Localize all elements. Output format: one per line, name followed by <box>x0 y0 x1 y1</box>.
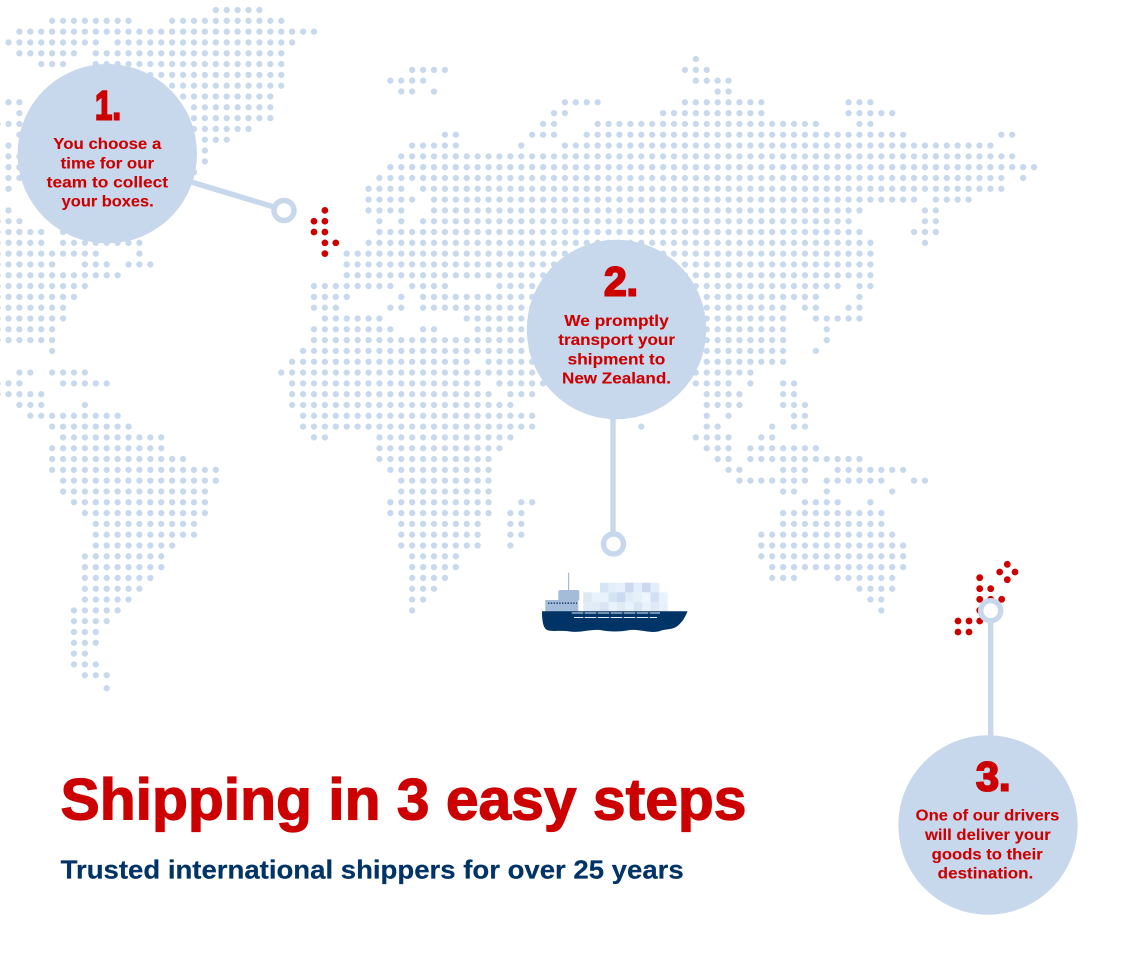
step 1 description: You choose a <box>53 136 162 153</box>
step 2 number: 2. <box>604 258 638 304</box>
connector: step 1 <box>188 181 294 220</box>
step 1 description: your boxes. <box>62 194 154 211</box>
connector: step 2 <box>604 410 624 554</box>
subtitle: Trusted international shippers for over 25 years <box>61 854 684 884</box>
dots: eurasia, africa, oceania <box>281 59 1034 610</box>
step 3 description: goods to their <box>932 846 1043 863</box>
step 1 description <box>47 136 169 211</box>
step 1 number: 1. <box>95 82 121 128</box>
step 1 badge <box>18 64 197 243</box>
ship mast <box>568 573 569 591</box>
ship containers <box>583 583 668 612</box>
red dots: new zealand <box>955 561 1018 635</box>
ship windows <box>548 602 577 604</box>
step 2 description: transport your <box>558 332 675 349</box>
step 2 description: We promptly <box>564 313 669 330</box>
step 3 description: One of our drivers <box>916 808 1060 825</box>
step 3 number: 3. <box>976 754 1010 800</box>
world dot map <box>0 10 1034 688</box>
step 2 description: shipment to <box>568 351 666 368</box>
step 2 description <box>558 313 675 387</box>
step 3 description: destination. <box>938 865 1033 882</box>
dots: greenland and northern canada <box>8 10 314 172</box>
step 2 description: New Zealand. <box>562 370 671 387</box>
ship hull <box>542 611 688 632</box>
step 1 description: time for our <box>61 155 154 172</box>
step 3 description <box>916 808 1060 882</box>
title: Shipping in 3 easy steps <box>60 767 746 832</box>
dots: north america and south america <box>0 102 216 688</box>
ship rails <box>572 613 660 618</box>
ship superstructure <box>545 590 579 612</box>
step 2 badge <box>527 240 706 419</box>
step 3 description: will deliver your <box>924 827 1051 844</box>
connector: step 3 <box>981 601 1001 740</box>
step 1 description: team to collect <box>47 175 169 192</box>
ship rail posts <box>584 612 649 618</box>
red dots: uk and ireland <box>314 210 336 254</box>
step 3 badge <box>898 735 1078 915</box>
container ship icon <box>542 573 688 632</box>
